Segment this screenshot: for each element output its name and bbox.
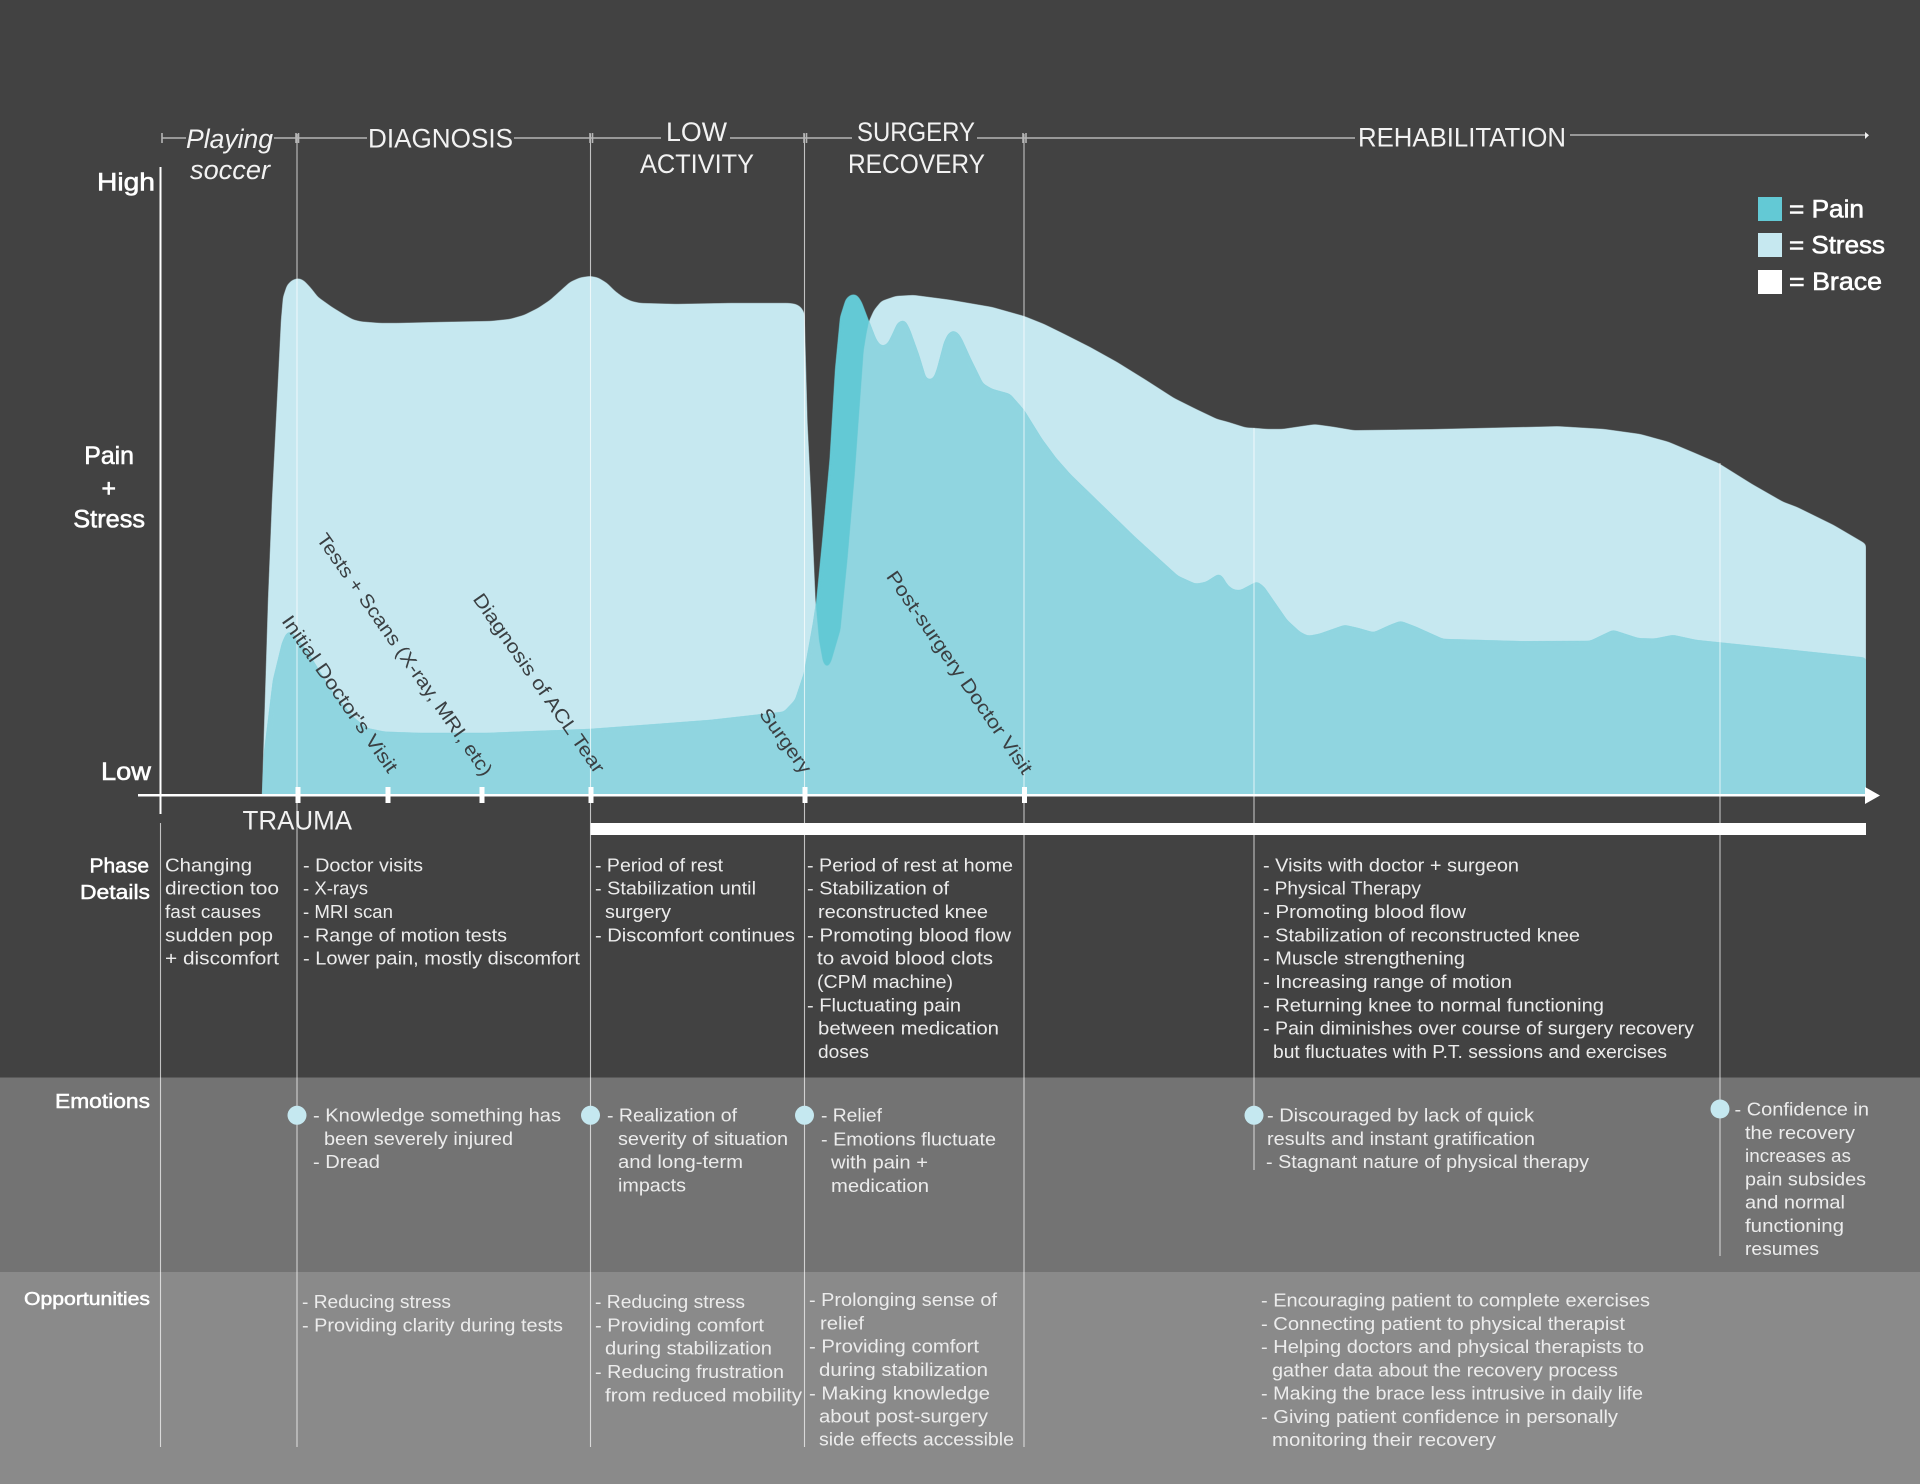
phase timeline bar [162,132,1869,143]
phase details: rehabilitation: - Pain diminishes over course of surgery recovery [1263,1018,1695,1039]
phase details: surgery recovery: - Fluctuating pain [807,994,961,1015]
opportunities: rehabilitation: - Giving patient confidence in personally [1261,1406,1619,1427]
phase details: playing soccer: direction too [165,878,279,899]
emotions: surgery recovery: - Emotions fluctuate [821,1128,996,1149]
emotions: rehabilitation [1266,1105,1590,1172]
emotions: late rehabilitation: functioning [1745,1215,1844,1236]
emotions: low activity [607,1105,788,1195]
emotions: rehabilitation: results and instant gratification [1267,1128,1535,1149]
y axis labels: Pain [84,442,134,470]
opportunities: surgery recovery: - Prolonging sense of [809,1289,998,1310]
heading: surgery recovery: RECOVERY [848,149,985,179]
row label: emotions: Emotions [55,1091,150,1113]
phase details: rehabilitation [1263,854,1695,1062]
phase details: surgery recovery: to avoid blood clots [817,948,993,969]
opportunities: surgery recovery [809,1289,1014,1450]
heading: rehabilitation: REHABILITATION [1358,123,1566,153]
arrow: time axis [1865,787,1880,804]
phase details: rehabilitation: - Promoting blood flow [1263,901,1467,922]
area: pain and stress overlap [262,294,1866,800]
phase details: low activity: - Stabilization until [595,878,756,899]
opportunities: surgery recovery: relief [820,1312,865,1333]
emotions: low activity: impacts [618,1174,686,1195]
heading: playing soccer: soccer [190,155,271,185]
panel: opportunities band [0,1272,1920,1484]
event: tests and scans: Tests + Scans (X-ray, MRI, etc) [312,530,496,780]
phase details: rehabilitation: - Muscle strengthening [1263,948,1465,969]
y axis labels: + [102,474,116,502]
trauma label: TRAUMA [242,805,352,835]
timeline phase dividers [160,134,1720,1447]
phase details: diagnosis: - Lower pain, mostly discomfort [303,948,580,969]
opportunities: surgery recovery: side effects accessible [819,1428,1014,1450]
phase details: diagnosis: - Doctor visits [303,854,423,876]
phase details: diagnosis: - Range of motion tests [303,924,507,945]
phase details: surgery recovery: doses [818,1041,869,1062]
heading: surgery recovery: SURGERY [857,117,975,147]
phase details: surgery recovery [807,854,1013,1062]
phase details: surgery recovery: - Promoting blood flow [807,924,1012,945]
opportunities: rehabilitation: gather data about the recovery process [1272,1359,1618,1380]
arrow: rehabilitation continues [1865,132,1869,139]
emotions: diagnosis: been severely injured [324,1128,513,1149]
emotions: surgery recovery: - Relief [821,1105,883,1126]
phase details: rehabilitation: - Visits with doctor + surgeon [1263,854,1519,876]
legend: stress: = Stress [1789,232,1885,260]
heading: low activity [640,117,754,179]
opportunities: surgery recovery: - Providing comfort [809,1336,979,1357]
phase details: surgery recovery: - Stabilization of [807,878,950,899]
phase details: rehabilitation: - Physical Therapy [1263,878,1422,899]
y axis labels: Stress [73,506,145,534]
opportunities: low activity: from reduced mobility [605,1384,803,1405]
phase details: playing soccer: fast causes [165,901,261,922]
opportunities: rehabilitation: - Helping doctors and physical therapists to [1261,1336,1644,1357]
heading: low activity: LOW [666,117,727,147]
panel: emotions band [0,1078,1920,1272]
emotions: late rehabilitation [1734,1098,1869,1259]
phase details: diagnosis [303,854,580,969]
emotions: surgery recovery: medication [831,1175,929,1196]
phase details: rehabilitation: but fluctuates with P.T. sessions and exercises [1273,1041,1667,1062]
emotions: late rehabilitation: and normal [1745,1192,1845,1213]
phase details: surgery recovery: (CPM machine) [817,971,953,992]
y axis labels: Low [101,758,152,786]
phase details: surgery recovery: - Period of rest at home [807,854,1013,876]
opportunities: rehabilitation: - Making the brace less intrusive in daily life [1261,1383,1643,1404]
y axis labels: High [97,169,155,197]
chart axes [138,167,1880,814]
axis event ticks [298,787,1024,803]
phase details: playing soccer: Changing [165,854,252,876]
emotion markers [288,1100,1730,1125]
emotions: surgery recovery [821,1105,996,1196]
phase details: surgery recovery: between medication [818,1018,999,1039]
emotions: diagnosis: - Dread [313,1151,380,1172]
area: pain [262,294,1866,800]
phase details: rehabilitation: - Stabilization of reconstructed knee [1263,924,1580,945]
legend: brace: = Brace [1789,268,1882,296]
phase details: low activity [595,854,795,945]
phase headings [186,117,1566,185]
heading: diagnosis: DIAGNOSIS [368,124,513,154]
row label: phase details: Details [80,882,150,904]
opportunities: low activity: - Reducing frustration [595,1361,784,1382]
row label: phase details: Phase [90,856,149,878]
opportunities: diagnosis [302,1291,563,1335]
opportunities: rehabilitation: - Encouraging patient to complete exercises [1261,1290,1650,1310]
emotions: late rehabilitation: the recovery [1745,1122,1856,1143]
phase details: rehabilitation: - Returning knee to normal functioning [1263,994,1604,1015]
opportunities: low activity: during stabilization [605,1338,772,1359]
area: stress [262,276,1866,800]
opportunities: low activity: - Providing comfort [595,1314,764,1335]
phase details: playing soccer: sudden pop [165,924,273,945]
phase details: low activity: - Discomfort continues [595,924,795,945]
opportunities: low activity [595,1291,803,1405]
phase details: playing soccer: + discomfort [165,948,279,969]
emotions: late rehabilitation: increases as [1745,1145,1851,1166]
emotions: low activity: - Realization of [607,1105,738,1126]
opportunities: rehabilitation: - Connecting patient to physical therapist [1261,1313,1625,1334]
opportunities: surgery recovery: during stabilization [819,1359,988,1380]
emotions: rehabilitation: - Stagnant nature of physical therapy [1266,1151,1590,1172]
legend [1758,196,1885,296]
row label: opportunities: Opportunities [24,1289,150,1309]
phase details: playing soccer [165,854,279,969]
heading: playing soccer: Playing [186,124,273,154]
opportunities: rehabilitation: monitoring their recovery [1272,1429,1497,1450]
emotions: late rehabilitation: pain subsides [1745,1168,1866,1189]
phase details: diagnosis: - MRI scan [303,901,393,922]
emotions: rehabilitation: - Discouraged by lack of quick [1267,1105,1535,1126]
emotions: low activity: and long-term [618,1151,743,1172]
emotions: surgery recovery: with pain + [830,1152,928,1172]
event: post-surgery doctor visit: Post-surgery Doctor Visit [881,567,1037,779]
event: surgery: Surgery [754,705,815,778]
opportunities: rehabilitation [1261,1290,1650,1450]
opportunities: diagnosis: - Providing clarity during tests [302,1314,563,1335]
opportunities: low activity: - Reducing stress [595,1291,745,1312]
chart: pain and stress areas [262,276,1866,800]
event: initial doctor's visit: Initial Doctor's Visit [277,612,402,778]
y axis labels [73,169,155,786]
emotions: low activity: severity of situation [618,1128,788,1149]
emotions: diagnosis: - Knowledge something has [313,1105,561,1126]
phase details: low activity: surgery [605,901,672,922]
phase details: rehabilitation: - Increasing range of motion [1263,971,1512,992]
heading: surgery recovery [848,117,985,179]
emotions: late rehabilitation: - Confidence in [1734,1098,1869,1120]
emotions: diagnosis [313,1105,561,1172]
row label: phase details [80,856,150,904]
opportunities: surgery recovery: about post-surgery [819,1406,989,1427]
event: diagnosis of ACL tear: Diagnosis of ACL Tear [468,590,609,778]
emotions: late rehabilitation: resumes [1745,1238,1819,1259]
phase details: diagnosis: - X-rays [303,878,368,899]
heading: low activity: ACTIVITY [640,149,754,179]
legend: pain: = Pain [1789,196,1864,224]
opportunities: surgery recovery: - Making knowledge [809,1382,990,1403]
opportunities: diagnosis: - Reducing stress [302,1291,451,1312]
heading: playing soccer [186,124,273,185]
phase details: surgery recovery: reconstructed knee [818,901,988,922]
diagonal event labels [277,530,1037,780]
brace duration bar [590,823,1866,835]
phase details: low activity: - Period of rest [595,854,723,876]
